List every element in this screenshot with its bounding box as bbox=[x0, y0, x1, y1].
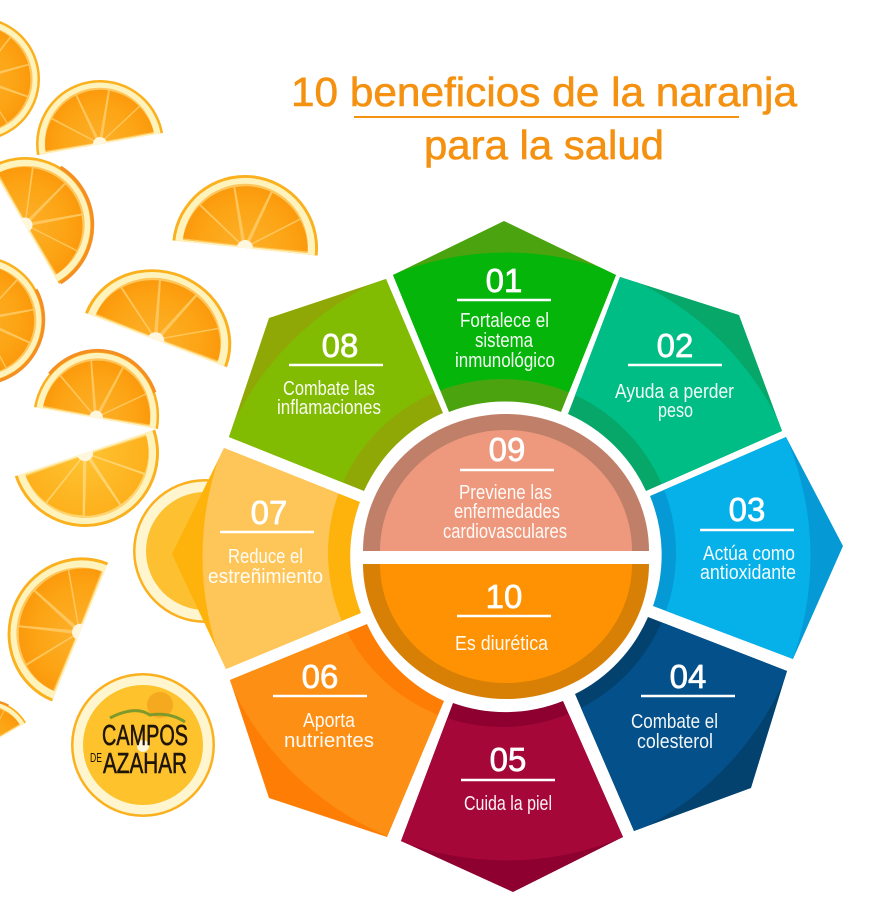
segment 06: 06 bbox=[302, 658, 338, 695]
center bottom half: 10: Es diurética bbox=[455, 633, 549, 655]
slice 3 bbox=[0, 122, 143, 298]
segment 07: Reduce el bbox=[228, 546, 303, 568]
segment 03: Actúa como bbox=[703, 543, 795, 565]
segment 01: 01 bbox=[486, 262, 522, 299]
center top half: 09: cardiovasculares bbox=[443, 521, 567, 543]
segment 04: 04 bbox=[670, 658, 706, 695]
segment 03 bbox=[650, 437, 843, 659]
segment 01: Fortalece el bbox=[460, 310, 549, 332]
segment 05: 05 bbox=[490, 741, 526, 778]
orange slices bbox=[0, 17, 325, 768]
segment 02: Ayuda a perder bbox=[615, 381, 734, 403]
segment 08 bbox=[229, 279, 443, 491]
center top half: 09 bbox=[363, 414, 649, 551]
segment 06: Aporta bbox=[303, 710, 356, 732]
slice 5 bbox=[85, 247, 252, 367]
slice 2 bbox=[26, 70, 163, 155]
slice 11 bbox=[0, 684, 26, 768]
segment 04: Combate el bbox=[631, 711, 718, 733]
slice 1 bbox=[0, 17, 40, 141]
title bbox=[291, 69, 797, 168]
segment 01: inmunológico bbox=[455, 350, 555, 372]
slice 9 bbox=[133, 479, 277, 623]
segment 06: nutrientes bbox=[284, 730, 374, 752]
segment 08: 08 bbox=[322, 327, 358, 364]
slice 4 bbox=[0, 256, 66, 403]
center bottom half: 10: 10 bbox=[486, 578, 522, 615]
logo: Campos de Azahar bbox=[71, 673, 215, 817]
segment 07: 07 bbox=[251, 494, 287, 531]
slice 10 bbox=[0, 535, 108, 702]
slice 7 bbox=[34, 340, 170, 429]
segment 03: antioxidante bbox=[700, 562, 796, 584]
segment 05: Cuida la piel bbox=[464, 793, 552, 815]
slice 8 bbox=[15, 430, 179, 547]
segment 08: Combate las bbox=[283, 378, 375, 400]
segment 03: 03 bbox=[729, 491, 765, 528]
center bottom half: 10 bbox=[363, 564, 649, 699]
segment 08: inflamaciones bbox=[277, 397, 381, 419]
slice 6 bbox=[172, 168, 325, 256]
segment 02 bbox=[568, 277, 782, 491]
segment 01: sistema bbox=[475, 330, 534, 352]
segment 02: 02 bbox=[657, 327, 693, 364]
segment 06 bbox=[230, 624, 444, 837]
segment 04 bbox=[575, 617, 787, 831]
center top half: 09: Previene las bbox=[459, 482, 552, 504]
segment 07 bbox=[172, 448, 361, 669]
segment 07: estreñimiento bbox=[208, 566, 323, 588]
logo: Campos de Azahar: AZAHAR bbox=[103, 748, 187, 780]
logo: Campos de Azahar: DE bbox=[90, 750, 102, 765]
center top half: 09: 09 bbox=[489, 431, 525, 468]
segment 01 bbox=[393, 221, 616, 412]
logo: Campos de Azahar: CAMPOS bbox=[102, 720, 188, 752]
segment 04: colesterol bbox=[637, 731, 713, 753]
segment 05 bbox=[401, 701, 623, 892]
center top half: 09: enfermedades bbox=[454, 501, 560, 523]
title: para la salud bbox=[424, 122, 664, 168]
segment 02: peso bbox=[658, 400, 693, 422]
title: 10 beneficios de la naranja bbox=[291, 69, 797, 115]
